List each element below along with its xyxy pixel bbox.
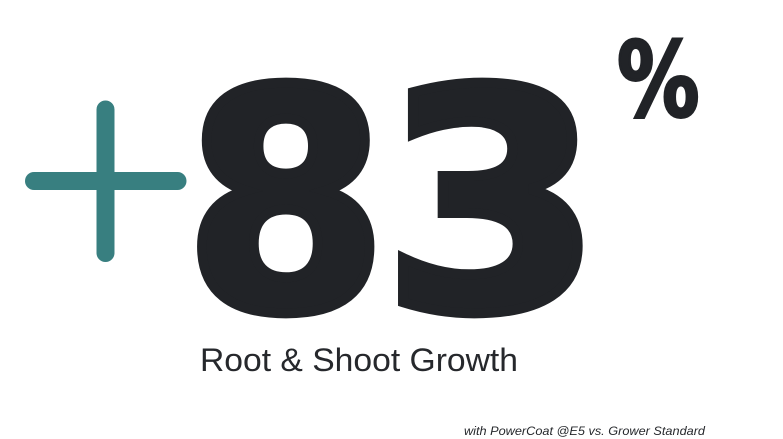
footnote: with PowerCoat @E5 vs. Grower Standard <box>464 424 705 438</box>
big number 83: 8 <box>184 25 388 381</box>
label: root and shoot growth: Root & Shoot Growth <box>200 342 518 378</box>
big number 83: 3 <box>382 27 603 382</box>
icon: plus sign <box>25 100 186 262</box>
big number 83 <box>184 25 603 382</box>
percent sign: % <box>617 20 700 140</box>
